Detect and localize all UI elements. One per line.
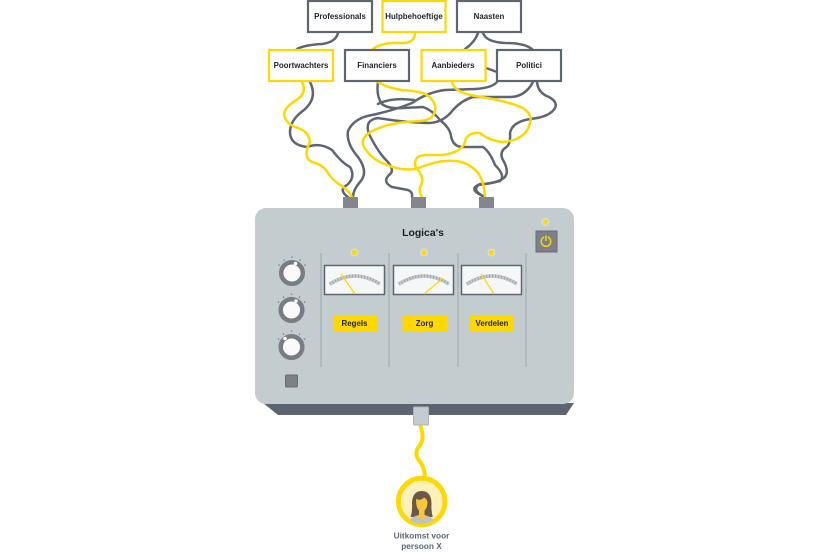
- meter: Verdelen: [462, 248, 522, 331]
- output wire: [416, 424, 425, 478]
- output caption: Uitkomst voor: [394, 530, 450, 540]
- meter: Verdelen: Verdelen: [476, 319, 509, 328]
- input sockets: [343, 197, 494, 208]
- actor: Politici: [497, 50, 561, 81]
- knob 3: [278, 331, 304, 358]
- actor: Aanbieders: Aanbieders: [432, 61, 475, 70]
- actor: Hulpbehoeftige: [382, 1, 446, 32]
- power lamp: [542, 218, 550, 226]
- actor: Naasten: Naasten: [474, 12, 505, 21]
- actor: Financiers: [345, 50, 409, 81]
- actor: Professionals: Professionals: [314, 12, 366, 21]
- output connector: [414, 407, 428, 425]
- knob 1: [279, 257, 305, 284]
- output caption: persoon X: [401, 541, 442, 551]
- meter: Regels: Regels: [342, 319, 368, 328]
- machine base: [263, 403, 574, 415]
- actor: Financiers: Financiers: [357, 61, 397, 70]
- knob 2: [278, 294, 304, 321]
- power button: [536, 231, 557, 252]
- actor: Poortwachters: Poortwachters: [274, 61, 329, 70]
- person icon: [398, 478, 445, 525]
- actor: Poortwachters: [269, 50, 333, 81]
- actor: Naasten: [457, 1, 521, 32]
- actor: Hulpbehoeftige: Hulpbehoeftige: [385, 12, 443, 21]
- column dividers: [321, 253, 526, 367]
- actor: Politici: Politici: [516, 61, 542, 70]
- square button: [286, 375, 298, 387]
- title: Logica's: [402, 228, 444, 239]
- meter: Regels: [324, 248, 384, 331]
- meter: Zorg: [394, 248, 454, 331]
- actor: Aanbieders: [422, 50, 486, 81]
- wires: connections between actors and logic sockets: [284, 33, 556, 197]
- machine panel: [255, 208, 574, 404]
- actor: Professionals: [308, 1, 372, 32]
- meter: Zorg: Zorg: [416, 319, 433, 328]
